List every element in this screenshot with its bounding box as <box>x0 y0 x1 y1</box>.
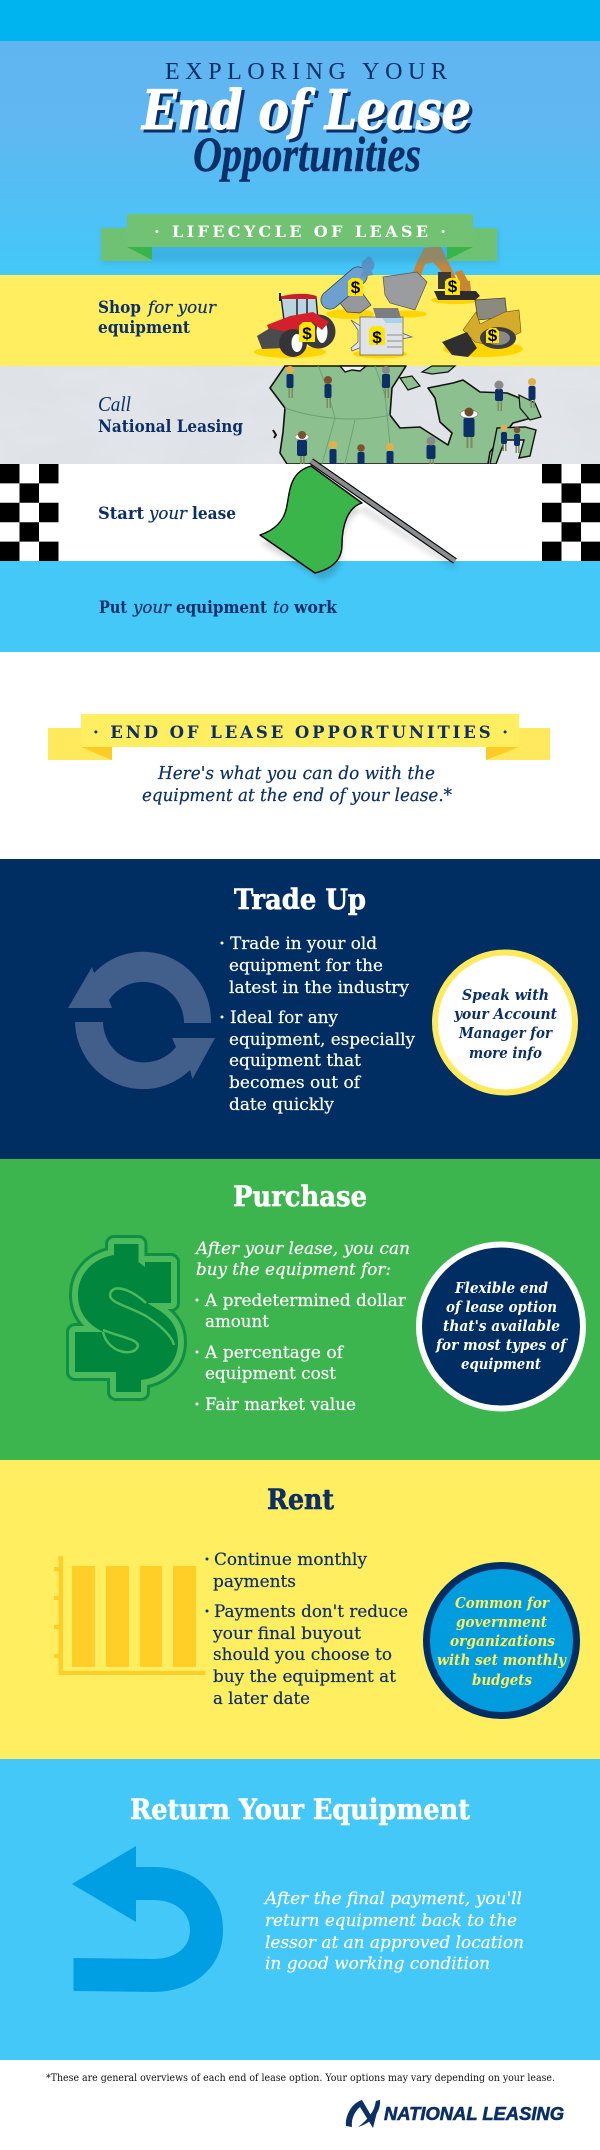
bullet list: your final buyout <box>212 1624 361 1643</box>
bullet list: equipment, especially <box>229 1030 416 1049</box>
bullet list: payments <box>213 1572 296 1591</box>
intro text <box>142 763 452 806</box>
panel: end of lease opportunities intro <box>0 652 600 859</box>
text: start your lease <box>98 504 236 523</box>
panel: put your equipment to work <box>0 561 600 652</box>
banner title: · LIFECYCLE OF LEASE · <box>154 222 446 241</box>
text: shop: Shop <box>98 298 141 317</box>
panel: footer <box>0 2060 600 2150</box>
icon: skid steer: $ <box>488 326 498 345</box>
text: call national leasing: Call <box>98 392 131 416</box>
icon: copier: $ <box>372 328 382 347</box>
callout: organizations <box>450 1633 555 1650</box>
panel: trade up <box>0 859 600 1159</box>
panel: return your equipment <box>0 1759 600 2060</box>
bullet list: a later date <box>213 1689 310 1708</box>
icon: cycle arrows <box>68 952 215 1089</box>
icon: small excavator <box>431 270 481 304</box>
text: start your lease: your <box>148 504 188 523</box>
text: call national leasing <box>98 392 243 436</box>
bullet list: Payments don't reduce <box>214 1602 408 1621</box>
text: put your equipment to work <box>99 598 338 617</box>
bar chart icon <box>54 1556 206 1675</box>
bullet list: A percentage of <box>204 1343 345 1362</box>
bullet list: A predetermined dollar <box>204 1291 406 1310</box>
callout: more info <box>469 1045 542 1062</box>
bullet list: Trade in your old <box>230 934 377 953</box>
text: shop: equipment <box>98 318 190 337</box>
text: call national leasing: National Leasing <box>98 417 243 436</box>
bullet list: amount <box>205 1312 269 1331</box>
heading: Rent <box>267 1483 334 1516</box>
callout <box>435 952 575 1092</box>
bullet list: should you choose to <box>213 1645 392 1664</box>
bullet list <box>220 934 416 1114</box>
bullet list: date quickly <box>229 1095 335 1114</box>
icon: skid steer <box>442 298 523 357</box>
text: shop <box>98 298 217 337</box>
person <box>357 444 365 464</box>
callout: equipment <box>461 1356 541 1373</box>
intro text: Here's what you can do with the <box>157 763 435 784</box>
logo mark <box>346 2100 380 2128</box>
icon: blue equipment <box>326 256 374 319</box>
callout: Manager for <box>458 1025 553 1042</box>
checkered pattern left <box>0 464 58 561</box>
person <box>460 408 478 448</box>
text: put your equipment to work: work <box>293 598 338 617</box>
panel: call national leasing <box>0 366 600 466</box>
callout: Flexible end <box>454 1280 548 1297</box>
icon: tractor: $ <box>302 324 312 343</box>
title: end of lease: End of Lease <box>143 81 474 145</box>
person <box>528 378 536 408</box>
body text: After the final payment, you'll <box>263 1889 522 1908</box>
callout: for most types of <box>435 1337 569 1354</box>
banner: end of lease opportunities <box>48 714 550 760</box>
bullet list <box>194 1239 410 1414</box>
bullet list: Ideal for any <box>230 1008 339 1027</box>
person <box>494 380 504 411</box>
callout: of lease option <box>446 1299 557 1316</box>
title: exploring your: EXPLORING YOUR <box>165 59 447 85</box>
bullet list <box>206 1550 408 1708</box>
callout: budgets <box>472 1672 532 1689</box>
body text: return equipment back to the <box>265 1911 517 1930</box>
heading: Trade Up <box>234 883 366 916</box>
text: put your equipment to work: to <box>273 598 289 617</box>
logo wordmark: NATIONAL LEASING <box>384 2104 564 2124</box>
bullet list: equipment that <box>229 1051 361 1070</box>
text: start your lease: lease <box>192 504 236 523</box>
person <box>500 424 508 451</box>
icon: small excavator: $ <box>448 277 458 296</box>
panel: purchase <box>0 1159 600 1460</box>
bullet list: becomes out of <box>229 1073 362 1092</box>
callout: with set monthly <box>437 1652 567 1669</box>
icon: copier <box>351 308 412 358</box>
icon: return arrow <box>72 1846 223 1992</box>
heading: Return Your Equipment <box>130 1793 470 1826</box>
panel: shop for your equipment <box>0 247 600 366</box>
callout <box>426 1566 576 1716</box>
panel: start your lease <box>0 464 600 561</box>
callout: that's available <box>443 1318 560 1335</box>
checkered pattern right <box>542 464 600 561</box>
bullet list: equipment for the <box>229 956 383 975</box>
bullet list: latest in the industry <box>229 978 410 997</box>
person <box>514 427 520 453</box>
footnote: *These are general overviews of each end of lease option. Your options may vary depending on your lease. <box>46 2072 555 2084</box>
callout: Speak with <box>462 987 549 1004</box>
banner: lifecycle of lease <box>101 214 498 263</box>
person <box>329 441 337 464</box>
text: put your equipment to work: equipment <box>176 598 267 617</box>
text: put your equipment to work: your <box>132 598 172 617</box>
bullet list: equipment cost <box>205 1364 336 1383</box>
bullet list: buy the equipment for: <box>196 1260 391 1279</box>
body text: in good working condition <box>265 1954 490 1973</box>
body text: lessor at an approved location <box>265 1933 524 1952</box>
banner title: · END OF LEASE OPPORTUNITIES · <box>93 723 508 742</box>
bullet list: Continue monthly <box>214 1550 368 1569</box>
person <box>382 366 390 398</box>
body text <box>263 1889 524 1973</box>
icon: tractor <box>254 293 336 358</box>
icon: blue equipment: $ <box>351 278 361 297</box>
text: start your lease: Start <box>98 504 144 523</box>
callout <box>419 1244 583 1408</box>
bullet list: buy the equipment at <box>213 1667 396 1686</box>
bullet list: After your lease, you can <box>194 1239 410 1258</box>
title: end of lease: End of Lease <box>140 78 471 142</box>
icon: excavator bucket <box>383 247 456 318</box>
callout: your Account <box>453 1006 557 1023</box>
person <box>426 436 436 464</box>
callout: Common for <box>455 1595 550 1612</box>
heading: Purchase <box>233 1180 367 1213</box>
person <box>286 366 294 398</box>
panel: rent <box>0 1460 600 1759</box>
logo: national leasing <box>346 2100 564 2128</box>
bullet list: Fair market value <box>205 1395 356 1414</box>
panel: header <box>0 0 600 275</box>
title: opportunities: Opportunities <box>193 126 421 182</box>
icon: green flag <box>260 461 456 580</box>
map: canada with account managers <box>270 366 541 466</box>
text: put your equipment to work: Put <box>99 598 127 617</box>
intro text: equipment at the end of your lease.* <box>142 785 452 806</box>
callout: government <box>456 1614 547 1631</box>
person <box>324 376 332 408</box>
person <box>295 431 309 466</box>
icon: dollar sign <box>75 1244 178 1392</box>
text: shop: for your <box>146 298 217 317</box>
person <box>386 443 394 464</box>
